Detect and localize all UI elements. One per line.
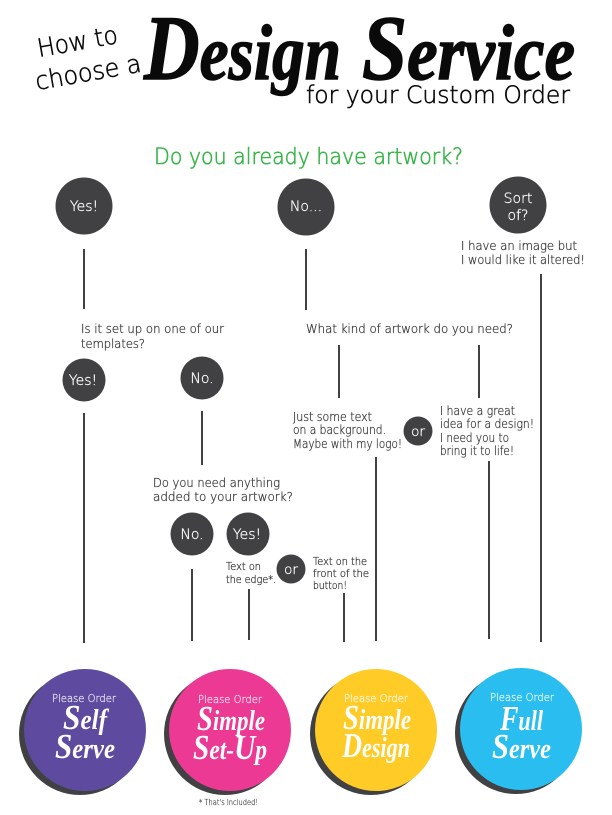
arrow: yes to question xyxy=(83,249,85,309)
result button: simple set-up: Set-Up xyxy=(193,728,267,767)
result button: self serve xyxy=(19,669,146,795)
answer: template yes xyxy=(62,358,106,402)
answer: sort of: Sort xyxy=(504,191,532,207)
arrow: no to question xyxy=(305,249,307,310)
text: sort of explanation xyxy=(461,239,585,267)
question: anything added: Do you need anything xyxy=(153,476,280,490)
result button: full serve: Serve xyxy=(492,727,551,766)
answer: template no xyxy=(180,356,224,400)
question: kind of artwork: What kind of artwork do you need? xyxy=(306,322,513,336)
text: great idea option: I have a great xyxy=(440,404,515,418)
text: text on the front: Text on the xyxy=(313,556,367,568)
text: some text option: Just some text xyxy=(293,410,372,424)
arrow: added no to simple set-up xyxy=(191,569,193,641)
result button: self serve: Self xyxy=(63,698,109,737)
arrow: to text option xyxy=(338,345,340,398)
result button: simple set-up: Please Order xyxy=(198,694,263,706)
question: set up on template: Is it set up on one of our xyxy=(81,322,224,336)
result button: simple design: Simple xyxy=(343,698,411,737)
result button: full serve xyxy=(455,668,582,794)
text: great idea option: idea for a design! xyxy=(440,417,534,431)
answer: sort of: of? xyxy=(508,208,528,224)
question: anything added xyxy=(153,476,293,504)
answer: yes: Yes! xyxy=(70,199,98,215)
title: choose a xyxy=(33,49,143,96)
title: Design xyxy=(143,0,341,99)
or badge: added xyxy=(276,554,306,584)
answer: no: No... xyxy=(290,199,322,215)
arrow: idea option to simple design xyxy=(488,461,490,639)
text: sort of explanation: I have an image but xyxy=(461,239,577,253)
heading: do you already have artwork: Do you already have artwork? xyxy=(154,145,463,170)
text: some text option: Maybe with my logo! xyxy=(293,437,402,451)
text: text on the edge: the edge*. xyxy=(226,574,276,586)
answer: template yes: Yes! xyxy=(69,373,97,389)
question: set up on template: templates? xyxy=(81,337,145,351)
arrow: front to simple design xyxy=(343,593,345,642)
result button: simple set-up xyxy=(164,669,291,795)
text: great idea option xyxy=(440,404,534,458)
text: some text option: on a background. xyxy=(293,423,386,437)
or badge: artwork xyxy=(404,416,432,446)
arrow: template yes to self serve xyxy=(83,413,85,643)
footnote: * That's Included! xyxy=(199,798,258,807)
title xyxy=(33,0,575,109)
answer: template no: No. xyxy=(190,371,214,387)
result button: full serve: Please Order xyxy=(490,692,555,704)
answer: added no: No. xyxy=(180,527,204,543)
text: text on the front xyxy=(313,556,369,592)
text: some text option xyxy=(293,410,402,451)
result button: self serve: Please Order xyxy=(52,693,117,705)
text: great idea option: I need you to xyxy=(440,431,509,445)
text: text on the front: front of the xyxy=(313,568,369,580)
arrow: to idea option xyxy=(478,345,480,398)
result button: self serve: Serve xyxy=(55,727,115,766)
text: text on the edge: Text on xyxy=(226,561,261,573)
result button: simple design: Design xyxy=(341,726,410,765)
answer: added yes xyxy=(226,512,270,556)
text: text on the front: button! xyxy=(313,580,347,592)
arrow: text option to simple design xyxy=(375,457,377,641)
result button: full serve: Full xyxy=(499,699,543,738)
question: anything added: added to your artwork? xyxy=(153,490,293,504)
result button: simple set-up: Simple xyxy=(197,699,265,738)
text: great idea option: bring it to life! xyxy=(440,444,514,458)
result button: simple design: Please Order xyxy=(344,693,409,705)
title: How to xyxy=(35,20,120,63)
arrow: sort of to full serve xyxy=(540,274,542,642)
arrow: template no to question xyxy=(201,411,203,465)
answer: added no xyxy=(170,512,214,556)
answer: yes xyxy=(56,178,112,234)
arrow: edge to simple set-up xyxy=(248,589,250,640)
answer: no xyxy=(278,178,334,236)
question: set up on template xyxy=(81,322,224,351)
title: for your Custom Order xyxy=(306,81,570,109)
text: text on the edge xyxy=(226,561,276,586)
or badge: added: or xyxy=(284,562,298,578)
answer: added yes: Yes! xyxy=(233,527,261,543)
text: sort of explanation: I would like it altered! xyxy=(461,253,585,267)
answer: sort of xyxy=(490,176,546,234)
title: Service xyxy=(362,0,575,99)
result button: simple design xyxy=(310,669,437,795)
or badge: artwork: or xyxy=(411,424,425,440)
